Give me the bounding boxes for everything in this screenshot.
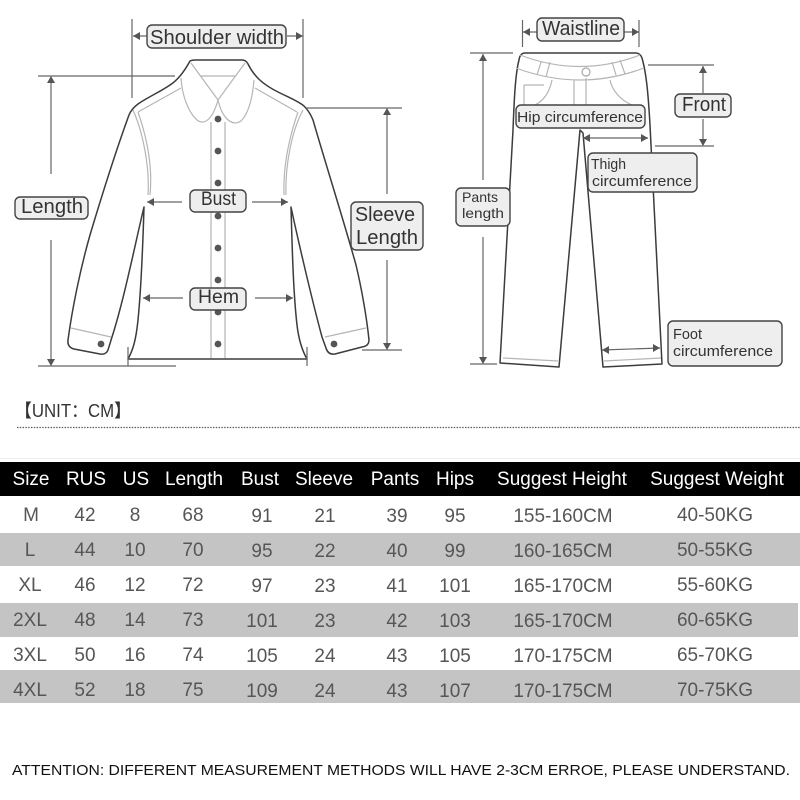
table header: Hips: [436, 469, 474, 490]
row M: 8: [130, 505, 140, 526]
table header: US: [123, 469, 149, 490]
jacket measurement lines: [38, 19, 402, 366]
row XL: 97: [251, 576, 273, 597]
row 3XL: 170-175CM: [513, 646, 613, 667]
row 2XL: 60-65KG: [677, 610, 753, 631]
row 3XL: 16: [124, 645, 146, 666]
pants outline: [500, 53, 662, 367]
row 3XL: 24: [314, 646, 336, 667]
row L: 99: [444, 541, 466, 562]
row XL: 12: [124, 575, 146, 596]
row L: 22: [314, 541, 336, 562]
row 4XL: 24: [314, 681, 336, 702]
row 4XL: 107: [439, 681, 471, 702]
row XL: 101: [439, 576, 471, 597]
row 3XL: 3XL: [13, 645, 47, 666]
row 4XL: 70-75KG: [677, 680, 753, 701]
label: sleeve length: Sleeve: [355, 204, 415, 226]
row XL: 55-60KG: [677, 575, 753, 596]
attention note: ATTENTION: DIFFERENT MEASUREMENT METHODS WILL HAVE 2-3CM ERROE, PLEASE UNDERSTAND.: [12, 763, 790, 779]
row 2XL: 165-170CM: [513, 611, 613, 632]
row XL: 72: [182, 575, 204, 596]
row 2XL: 73: [182, 610, 204, 631]
row L: 50-55KG: [677, 540, 753, 561]
row 3XL: 74: [182, 645, 204, 666]
row L: 40: [386, 541, 408, 562]
table header: RUS: [66, 469, 106, 490]
row 3XL: [13, 645, 753, 667]
row 3XL: 105: [246, 646, 278, 667]
label: thigh circumference: [588, 153, 697, 192]
label: bust: Bust: [201, 189, 237, 210]
row L: 44: [74, 540, 96, 561]
row 4XL: 109: [246, 681, 278, 702]
jacket outline: [68, 60, 369, 359]
row M: 40-50KG: [677, 505, 753, 526]
pants waistband and pockets: [503, 55, 661, 361]
label: front: Front: [682, 94, 726, 116]
jacket diagram: [68, 60, 369, 359]
row 4XL: 43: [386, 681, 408, 702]
label: thigh circumference: circumference: [592, 173, 692, 190]
row 3XL: 43: [386, 646, 408, 667]
row M: 21: [314, 506, 336, 527]
table header: Length: [165, 469, 223, 490]
table header: Pants: [371, 469, 419, 490]
row M: 39: [386, 506, 408, 527]
table header: Suggest Weight: [650, 469, 785, 490]
pants diagram: [500, 53, 662, 367]
row 2XL: 2XL: [13, 610, 47, 631]
jacket buttons: [98, 116, 337, 347]
table header: Size: [13, 469, 49, 490]
row 4XL: [0, 670, 800, 703]
row M: [23, 505, 753, 527]
row XL: 165-170CM: [513, 576, 613, 597]
row M: M: [23, 505, 39, 526]
label: bust: [190, 189, 246, 212]
size table: [0, 462, 800, 703]
row M: 95: [444, 506, 466, 527]
row 4XL: 75: [182, 680, 204, 701]
row 4XL: 52: [74, 680, 96, 701]
unit heading: 【UNIT：CM】: [15, 401, 131, 421]
row XL: [18, 575, 753, 597]
label: waistline: Waistline: [542, 18, 620, 40]
pants button: [582, 68, 590, 76]
label: thigh circumference: Thigh: [591, 156, 626, 173]
row L: 95: [251, 541, 273, 562]
label: pants length: [456, 188, 510, 226]
row L: 10: [124, 540, 146, 561]
row XL: 23: [314, 576, 336, 597]
row 2XL: 101: [246, 611, 278, 632]
label: pants length: Pants: [462, 189, 498, 205]
table header: Bust: [241, 469, 280, 490]
table header: [0, 462, 800, 496]
row M: 42: [74, 505, 96, 526]
row L: [0, 533, 800, 566]
label: pants length: length: [462, 205, 504, 221]
row M: 91: [251, 506, 273, 527]
label: foot circumference: [668, 321, 782, 366]
row 3XL: 65-70KG: [677, 645, 753, 666]
row L: 70: [182, 540, 204, 561]
label: sleeve length: [351, 202, 423, 250]
row 2XL: 42: [386, 611, 408, 632]
table header: Suggest Height: [497, 469, 628, 490]
jacket seams and placket: [71, 88, 366, 358]
row 3XL: 50: [74, 645, 96, 666]
row XL: XL: [18, 575, 42, 596]
label: hem: Hem: [198, 287, 239, 308]
row XL: 41: [386, 576, 408, 597]
label: shoulder width: Shoulder width: [150, 27, 284, 49]
row M: 68: [182, 505, 204, 526]
row L: L: [25, 540, 35, 561]
label: length: Length: [21, 196, 83, 218]
row 4XL: 170-175CM: [513, 681, 613, 702]
label: hip circumference: Hip circumference: [517, 109, 643, 126]
row 4XL: 4XL: [13, 680, 47, 701]
row XL: 46: [74, 575, 96, 596]
row 2XL: 103: [439, 611, 471, 632]
row 2XL: 14: [124, 610, 146, 631]
table header: Sleeve: [295, 469, 353, 490]
pants measurement lines: [470, 20, 714, 364]
row 3XL: 105: [439, 646, 471, 667]
row 2XL: [0, 603, 798, 637]
row 4XL: 18: [124, 680, 146, 701]
label: hip circumference: [516, 105, 645, 128]
label: hem: [190, 287, 246, 310]
row 2XL: 23: [314, 611, 336, 632]
label: foot circumference: circumference: [673, 343, 773, 360]
label: sleeve length: Length: [356, 227, 418, 249]
row L: 160-165CM: [513, 541, 613, 562]
row M: 155-160CM: [513, 506, 613, 527]
row 2XL: 48: [74, 610, 96, 631]
jacket collar: [181, 63, 254, 123]
label: foot circumference: Foot: [673, 326, 703, 343]
